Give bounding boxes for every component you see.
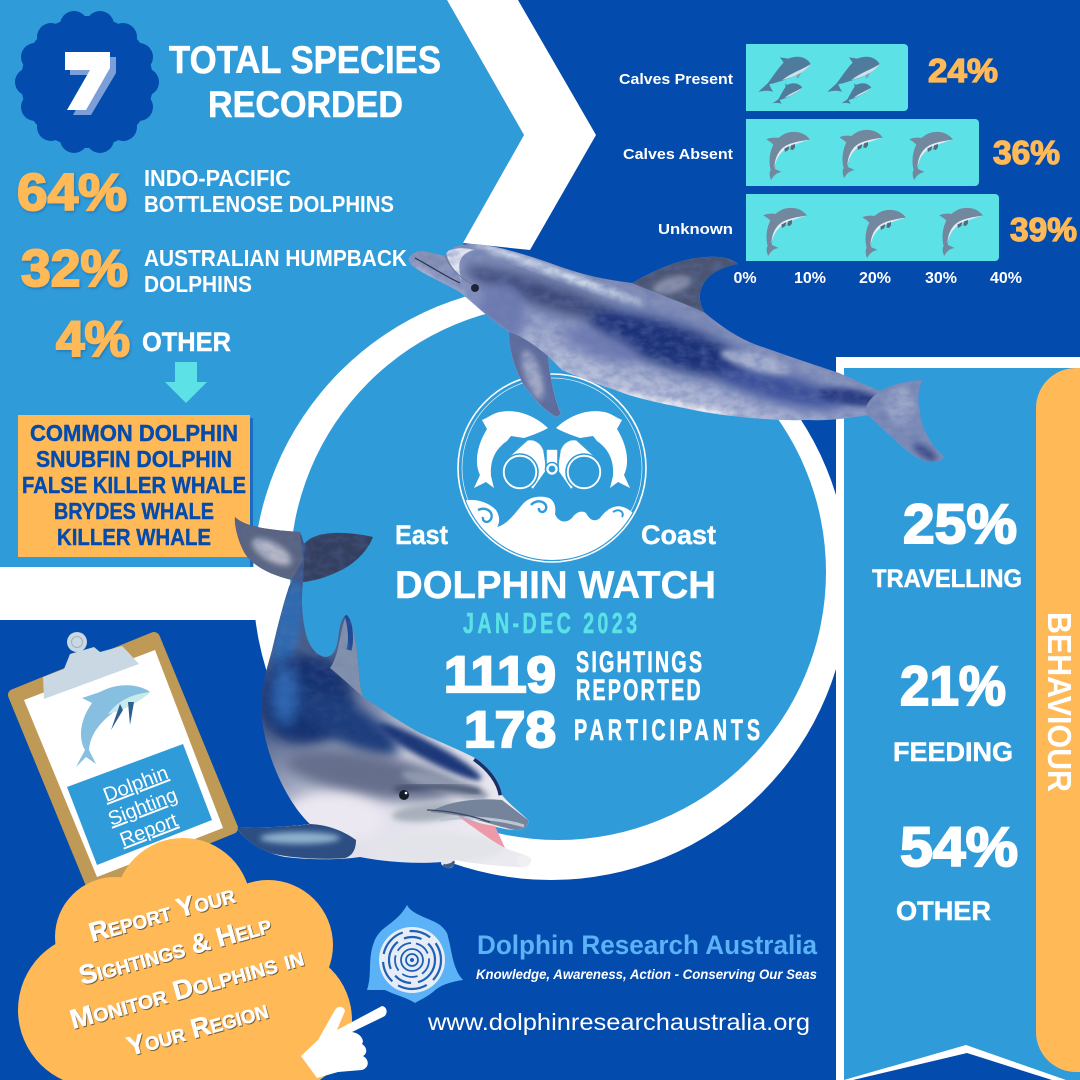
bar: calves absent xyxy=(623,119,1060,186)
arrow: down to other species xyxy=(165,362,207,403)
badge: total species xyxy=(15,11,159,153)
stat: indo-pacific bottlenose xyxy=(17,164,394,222)
illustration: top dolphin xyxy=(408,244,944,462)
stat: other behaviour: 54% xyxy=(900,815,1018,878)
list: other species box: COMMON DOLPHIN xyxy=(30,420,238,446)
panel: behaviour ribbon xyxy=(836,357,1080,1080)
bar: calves present: 24% xyxy=(928,52,998,89)
stat: travelling xyxy=(872,492,1022,593)
heading: east coast dolphin watch: Coast xyxy=(641,520,716,550)
stat: other species: 4% xyxy=(56,311,130,367)
bar: calves absent: Calves Absent xyxy=(623,146,733,163)
stat: australian humpback: AUSTRALIAN HUMPBACK xyxy=(144,245,407,271)
list: other species box: FALSE KILLER WHALE xyxy=(22,472,246,498)
bar: unknown: Unknown xyxy=(658,221,733,238)
right dolphin xyxy=(556,411,630,488)
stat: other species: OTHER xyxy=(142,327,231,357)
clip xyxy=(43,632,139,699)
central circle panel xyxy=(290,304,826,840)
list: other species box xyxy=(18,415,253,567)
heading: east coast dolphin watch xyxy=(395,520,716,607)
chart: calves bar pictogram xyxy=(619,44,1077,287)
stat: travelling: TRAVELLING xyxy=(872,565,1022,593)
stat: australian humpback xyxy=(21,240,407,298)
chart axis xyxy=(733,270,1022,287)
stat: sightings reported: SIGHTINGS xyxy=(576,646,702,679)
bar: unknown: 39% xyxy=(1010,211,1077,248)
heading: east coast dolphin watch: East xyxy=(395,520,448,550)
website url: www.dolphinresearchaustralia.org xyxy=(427,1009,810,1035)
heading: total species recorded xyxy=(169,39,441,125)
stat: indo-pacific bottlenose: BOTTLENOSE DOLPHINS xyxy=(144,191,394,217)
list: other species box: BRYDES WHALE xyxy=(54,498,214,524)
heading: total species recorded: TOTAL SPECIES xyxy=(169,39,441,82)
stat: australian humpback: DOLPHINS xyxy=(144,271,252,297)
stat: sightings reported: 1119 xyxy=(444,646,556,703)
bar: calves present xyxy=(619,44,998,111)
stat: travelling: 25% xyxy=(903,492,1017,555)
stat: indo-pacific bottlenose: 64% xyxy=(17,164,127,222)
stat: other species xyxy=(56,311,231,367)
chart axis: 20% xyxy=(859,270,891,287)
left dolphin xyxy=(474,411,548,488)
list: other species box: KILLER WHALE xyxy=(57,524,211,550)
chart axis: 30% xyxy=(925,270,957,287)
report button: Report xyxy=(117,809,181,851)
icon: pointing hand xyxy=(301,1006,387,1078)
illustration: lower dolphin xyxy=(230,510,540,880)
logo: dolphin watch xyxy=(456,374,650,565)
cloud callout: report your sightings: Report Your xyxy=(86,879,238,948)
binoculars xyxy=(502,439,602,490)
bar: calves absent: 36% xyxy=(993,134,1060,171)
heading: total species recorded: RECORDED xyxy=(208,84,403,125)
chart axis: 10% xyxy=(794,270,826,287)
date range: JAN-DEC 2023 xyxy=(463,608,637,640)
organisation name: Dolphin Research Australia xyxy=(477,930,818,960)
logo: dolphin research australia xyxy=(367,905,463,1003)
stat: feeding: FEEDING xyxy=(893,737,1013,767)
white band xyxy=(0,567,300,620)
stat: feeding xyxy=(893,654,1013,767)
clipboard: dolphin sighting report xyxy=(14,632,232,885)
stat: feeding: 21% xyxy=(900,654,1006,717)
stat: indo-pacific bottlenose: INDO-PACIFIC xyxy=(144,165,291,191)
bar: calves present: Calves Present xyxy=(619,71,733,88)
bar: unknown xyxy=(658,194,1077,261)
stat: participants xyxy=(464,701,760,758)
report button: Sighting xyxy=(105,784,181,831)
cloud callout: report your sightings: Your Region xyxy=(124,994,271,1062)
stat: participants: PARTICIPANTS xyxy=(574,714,760,747)
cloud callout: report your sightings: Sightings & Help xyxy=(76,909,275,991)
stat: sightings reported xyxy=(444,646,702,707)
report button: Dolphin xyxy=(100,762,171,807)
mouth xyxy=(457,815,505,848)
panel: species chevron xyxy=(0,0,524,567)
heading: behaviour: BEHAVIOUR xyxy=(1041,612,1078,792)
stat: other behaviour xyxy=(896,815,1018,926)
tagline: Knowledge, Awareness, Action - Conserving Our Seas xyxy=(476,966,817,982)
stat: other behaviour: OTHER xyxy=(896,896,991,926)
stat: sightings reported: REPORTED xyxy=(576,674,701,707)
central circle ring xyxy=(253,284,849,880)
report button xyxy=(67,744,212,865)
cloud callout: report your sightings: Monitor Dolphins in xyxy=(67,941,307,1035)
stat: australian humpback: 32% xyxy=(21,240,128,298)
heading: east coast dolphin watch: DOLPHIN WATCH xyxy=(395,564,716,607)
stat: participants: 178 xyxy=(464,701,556,758)
list: other species box: SNUBFIN DOLPHIN xyxy=(36,446,232,472)
chart axis: 40% xyxy=(990,270,1022,287)
wave xyxy=(466,496,632,560)
icon: small dolphin xyxy=(76,685,150,767)
chart axis: 0% xyxy=(733,270,757,287)
cloud callout: report your sightings xyxy=(18,838,352,1080)
white chevron arrow xyxy=(447,0,596,250)
